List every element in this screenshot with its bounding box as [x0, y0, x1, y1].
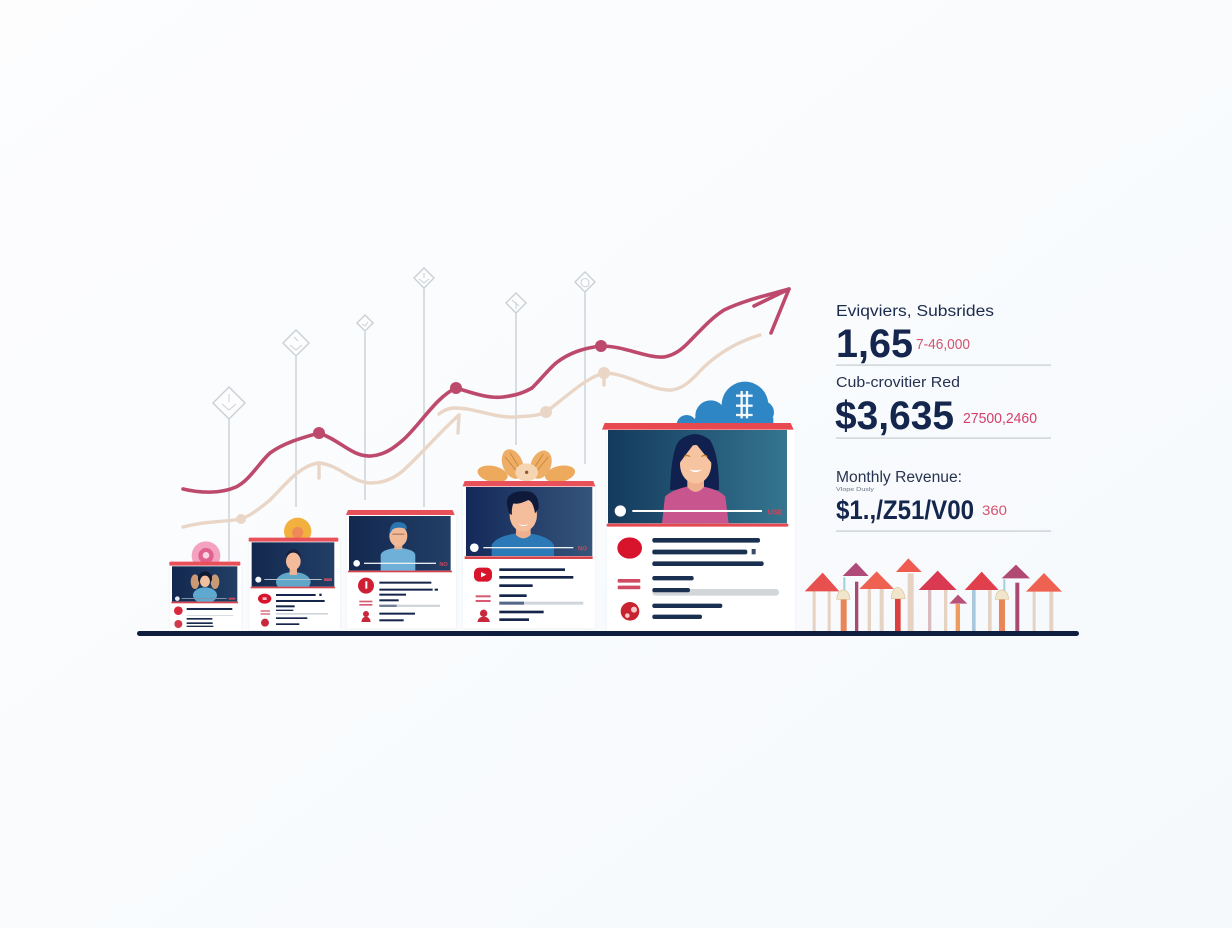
video badge text: NO: [439, 562, 448, 568]
person icon: [361, 611, 371, 622]
stat label: Monthly Revenue:: [836, 469, 962, 486]
village of arrows: [805, 558, 1062, 631]
info rows: [276, 594, 328, 625]
presenter: [492, 491, 554, 556]
card 5: largest video panel: [602, 382, 795, 632]
card 2: small video panel: [249, 518, 340, 630]
baseline: [137, 631, 1079, 636]
person icon: [477, 610, 490, 622]
pin 5: [506, 293, 526, 445]
pink badge: [192, 541, 220, 562]
pin 1: [213, 387, 245, 561]
red growth arrow: [183, 289, 789, 492]
info rows: [379, 582, 440, 621]
stat value: 1,65: [836, 322, 913, 366]
stat range: 7-46,000: [916, 336, 970, 353]
stat value: $3,635: [835, 394, 954, 438]
pin 4: [414, 268, 434, 507]
red icons: [617, 537, 642, 621]
stat range: 360: [982, 502, 1007, 518]
small caption: Vlope Dusly: [836, 487, 874, 493]
milestone pins: [213, 268, 595, 561]
info rows: [652, 538, 779, 619]
stat value: $1.,/Z51/V00: [836, 495, 974, 525]
presenter: [662, 434, 729, 523]
stat label: Cub-crovitier Red: [836, 374, 960, 391]
presenter: [381, 522, 415, 571]
stat label: Eviqviers, Subsrides: [836, 303, 994, 320]
bow decoration: [476, 446, 577, 485]
pin 3: [357, 315, 373, 500]
beige secondary trend line: [183, 335, 760, 527]
card 3: medium video panel: [346, 510, 456, 628]
video badge text: NO: [578, 546, 587, 552]
stat block: views: [836, 303, 1051, 366]
video badge text: USE: [768, 507, 783, 516]
pin 6: [575, 272, 595, 464]
stat block: monthly revenue: [836, 469, 1051, 532]
info rows: [499, 568, 583, 621]
stat block: subscribers: [835, 374, 1051, 439]
stat range: 27500,2460: [963, 410, 1037, 427]
card 4: large video panel: [463, 446, 595, 628]
blue cloud: [676, 382, 774, 423]
orange badge: [284, 518, 312, 538]
card 1: smallest video panel: [169, 541, 241, 631]
info rows: [187, 608, 233, 627]
pin 2: [283, 330, 309, 507]
presenter: [191, 571, 219, 603]
presenter: [276, 550, 311, 586]
